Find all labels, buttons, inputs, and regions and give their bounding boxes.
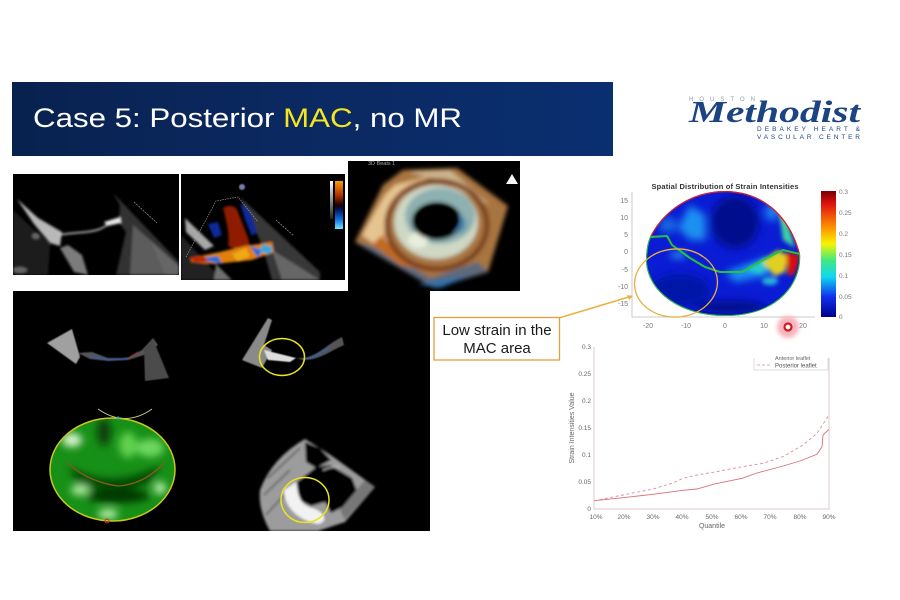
chart: strain by quantile: 0.2 xyxy=(582,398,591,405)
chart: strain by quantile: 0.1 xyxy=(582,452,591,459)
chart: strain by quantile: 60% xyxy=(734,514,748,521)
upper-left long-axis slice xyxy=(47,329,169,381)
chart: strain by quantile: 0.3 xyxy=(582,344,591,351)
chart: spatial distribution of strain intensities: -20 xyxy=(643,323,653,330)
y axis title: Strain Intensities Value xyxy=(569,392,576,464)
axes xyxy=(632,192,815,317)
title: Case 5: Posterior MAC , no MR xyxy=(33,103,462,133)
chart: strain by quantile: 90% xyxy=(822,514,836,521)
colour bar xyxy=(821,191,836,317)
multiplanar echo panel xyxy=(13,291,430,531)
chart: spatial distribution of strain intensities: 0.2 xyxy=(839,231,848,238)
chart: spatial distribution of strain intensities: 15 xyxy=(620,198,628,205)
echo image: 3D en-face mitral valve xyxy=(348,161,520,291)
MAC area ellipse xyxy=(632,246,720,320)
chart: strain by quantile: 70% xyxy=(763,514,777,521)
yellow highlight circle, lower slice xyxy=(281,478,329,522)
logo: Houston Methodist: Methodist xyxy=(688,94,862,129)
yellow highlight circle, upper slice xyxy=(260,338,304,376)
logo: Houston Methodist: DEBAKEY HEART & xyxy=(757,126,861,133)
logo: Houston Methodist: VASCULAR CENTER xyxy=(757,134,860,141)
upper-right long-axis slice xyxy=(242,318,344,368)
chart: strain by quantile: 30% xyxy=(646,514,660,521)
orientation marker xyxy=(506,174,518,184)
chart: strain by quantile: 0.15 xyxy=(578,425,591,432)
lower-right short-axis sector xyxy=(260,439,375,531)
posterior leaflet line xyxy=(594,415,829,501)
callout: low strain xyxy=(434,295,633,360)
chart: spatial distribution of strain intensities: -5 xyxy=(622,267,628,274)
chart: spatial distribution of strain intensities: -10 xyxy=(618,284,628,291)
echo image: colour Doppler xyxy=(181,174,345,280)
chart: spatial distribution of strain intensities: 20 xyxy=(799,323,807,330)
x axis title: Quantile xyxy=(699,523,725,530)
chart: strain by quantile: 50% xyxy=(705,514,719,521)
chart: spatial distribution of strain intensities: 0.1 xyxy=(839,273,848,280)
anterior leaflet line xyxy=(594,429,829,501)
chart: spatial distribution of strain intensities: 0 xyxy=(839,314,843,321)
green 3D valve model xyxy=(50,409,175,523)
legend xyxy=(754,356,828,370)
chart: spatial distribution of strain intensities: 0.05 xyxy=(839,294,852,301)
chart: strain by quantile: 0.25 xyxy=(578,371,591,378)
heat map xyxy=(646,191,800,316)
chart: strain by quantile xyxy=(569,344,836,530)
chart title: Spatial Distribution of Strain Intensities xyxy=(652,182,798,191)
chart: spatial distribution of strain intensities: 0.25 xyxy=(839,210,852,217)
chart: spatial distribution of strain intensities: 10 xyxy=(620,215,628,222)
legend: Anterior leaflet xyxy=(775,356,811,362)
chart: spatial distribution of strain intensities: 0.15 xyxy=(839,252,852,259)
laser pointer dot xyxy=(777,316,799,338)
chart: strain by quantile: 40% xyxy=(675,514,689,521)
echo image: 2D long axis xyxy=(13,174,179,275)
logo: Houston Methodist: HOUSTON xyxy=(689,97,755,103)
annulus traces xyxy=(650,191,800,254)
chart: strain by quantile: 20% xyxy=(617,514,631,521)
chart: spatial distribution of strain intensities: -15 xyxy=(618,301,628,308)
callout: low strain: Low strain in the xyxy=(442,322,552,339)
legend: Posterior leaflet xyxy=(775,364,817,370)
callout: low strain: MAC area xyxy=(463,340,531,357)
chart: strain by quantile: 0.05 xyxy=(578,479,591,486)
chart: spatial distribution of strain intensities: -10 xyxy=(681,323,691,330)
label: 3D beats: 3D Beats 1 xyxy=(368,161,395,167)
chart: strain by quantile: 80% xyxy=(793,514,807,521)
Doppler colour scale xyxy=(330,181,343,229)
chart: spatial distribution of strain intensities: 5 xyxy=(624,232,628,239)
chart: spatial distribution of strain intensities: 0.3 xyxy=(839,189,848,196)
title banner xyxy=(12,82,613,156)
chart: spatial distribution of strain intensities xyxy=(618,182,852,330)
chart: strain by quantile: 0 xyxy=(587,506,591,513)
chart: spatial distribution of strain intensities: 0 xyxy=(624,249,628,256)
chart: spatial distribution of strain intensities: 0 xyxy=(723,323,727,330)
chart: spatial distribution of strain intensities: 10 xyxy=(760,323,768,330)
logo: Houston Methodist xyxy=(688,94,862,141)
chart: strain by quantile: 10% xyxy=(589,514,603,521)
